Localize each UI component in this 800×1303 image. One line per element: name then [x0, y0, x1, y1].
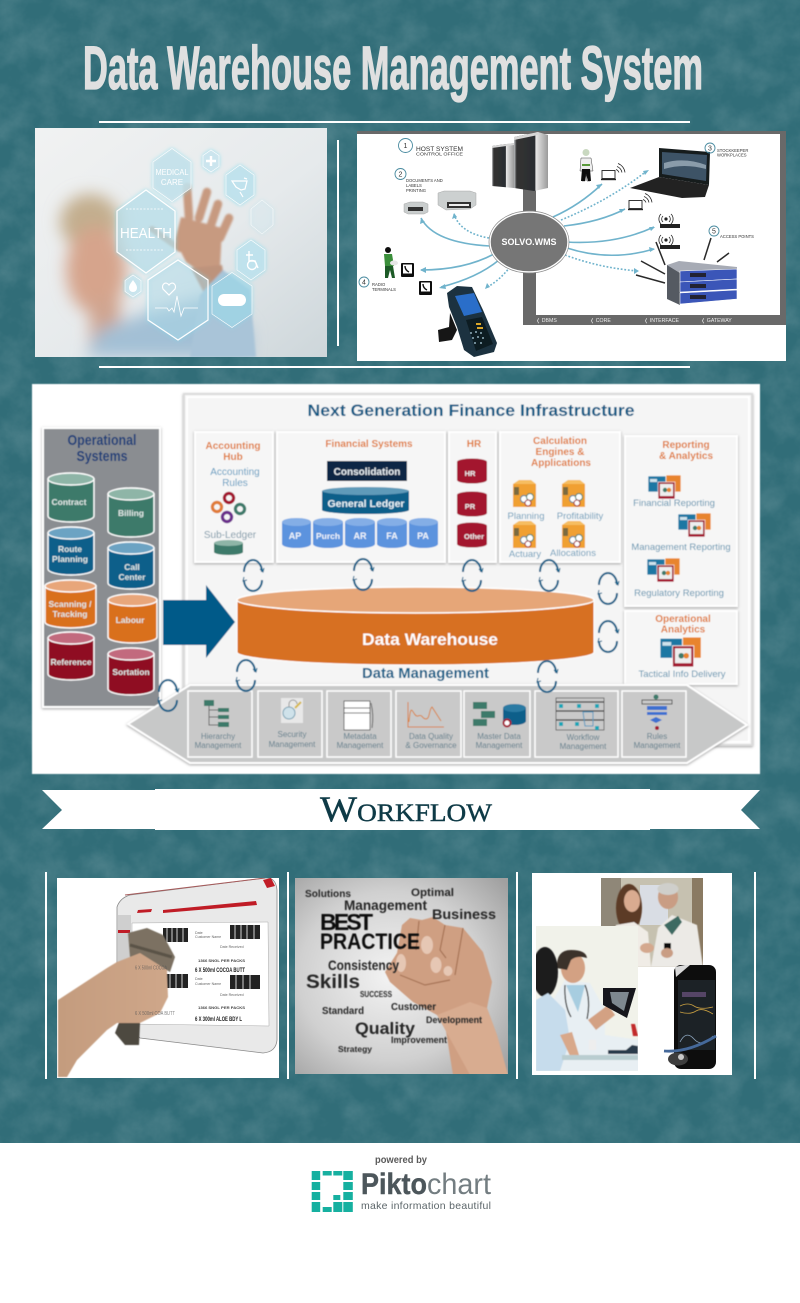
- panel: operational analytics: Operational: [655, 614, 711, 625]
- photo: doctors: [532, 873, 732, 1075]
- module labels: Hierarchy: [201, 732, 235, 741]
- arrow: operational to warehouse: [163, 585, 235, 658]
- data management band: [128, 685, 747, 763]
- module labels: Metadata: [343, 732, 377, 741]
- infrastructure heading: Next Generation Finance Infrastructure: [308, 401, 634, 420]
- panel: calculation engines: Applications: [531, 458, 591, 469]
- panel: calculation engines: Profitability: [557, 511, 603, 522]
- panel: HR: PR: [465, 502, 476, 511]
- panel: financial systems: Purch: [316, 531, 340, 541]
- panel: reporting and analytics: Financial Reporting: [633, 498, 715, 509]
- panel: financial systems: [277, 432, 445, 562]
- handheld terminal: [438, 286, 497, 357]
- cylinders: operational systems: [45, 473, 157, 695]
- divider vertical: [337, 140, 339, 346]
- diagram labels: RADIO: [372, 282, 386, 287]
- small device icons: [401, 164, 652, 295]
- panel: calculation engines: Actuary: [509, 549, 541, 560]
- diagram labels: PRINTING: [406, 188, 426, 193]
- icons: sync connectors: [158, 559, 619, 711]
- panel: operational analytics: [625, 611, 737, 684]
- scanner and arm: [58, 928, 175, 1077]
- cylinder labels: Planning: [52, 554, 88, 564]
- panel: calculation engines: Allocations: [550, 548, 596, 559]
- photo: barcode scanner: Customer Name: [195, 982, 221, 986]
- panel: financial systems: AR: [354, 531, 367, 541]
- diagram labels: 5: [712, 228, 716, 236]
- diagram labels: ACCESS POINTS: [720, 234, 754, 239]
- operational heading: [68, 432, 136, 465]
- photo: barcode scanner: 6 X 500ml COCOA: [135, 966, 167, 972]
- panel: HR: [449, 432, 496, 562]
- diagram: SOLVO.WMS: [357, 131, 786, 361]
- module labels: Security: [278, 730, 306, 739]
- piktochart wordmark: Pikto: [361, 1168, 427, 1201]
- hexagon labels: CARE: [161, 178, 183, 187]
- panel: HR: HR: [467, 439, 482, 450]
- module labels: Rules: [647, 732, 667, 741]
- module labels: Master Data: [477, 732, 521, 741]
- workflow dividers: [45, 872, 756, 1079]
- photo: barcode scanner: 6 X 500ml COA BUTT: [135, 1011, 175, 1017]
- servers: [492, 132, 548, 191]
- module labels: Management: [337, 741, 384, 750]
- diagram labels: 3: [708, 146, 712, 152]
- word cloud: Management: [344, 897, 427, 913]
- gray band labels: ❬ GATEWAY: [701, 318, 732, 324]
- photo: barcode scanner: Date Received: [220, 945, 244, 949]
- router stack: [636, 238, 737, 305]
- photo: barcode scanner: Date Received: [220, 993, 244, 997]
- cylinder labels: Reference: [50, 657, 92, 667]
- module labels: Management: [634, 741, 681, 750]
- module labels: Management: [476, 741, 523, 750]
- cylinder labels: Contract: [52, 497, 87, 507]
- cylinder labels: Billing: [118, 508, 144, 518]
- operational heading: Operational: [68, 432, 136, 449]
- panel: calculation engines: Planning: [508, 511, 544, 522]
- panel: operational systems: [43, 428, 160, 707]
- hexagon labels: MEDICAL: [156, 168, 189, 177]
- photo: health hexagons: [35, 128, 327, 357]
- cylinder labels: Center: [119, 572, 146, 582]
- word cloud: Improvement: [391, 1035, 447, 1045]
- hexagon labels: [120, 168, 189, 242]
- diagram labels: HOST SYSTEM: [416, 146, 463, 153]
- module labels: Workflow: [567, 733, 600, 742]
- data management heading: Data Management: [362, 665, 489, 682]
- panel: HR: HR: [465, 469, 476, 478]
- panel: financial systems: Financial Systems: [325, 439, 413, 450]
- word cloud: [305, 887, 496, 1054]
- word cloud: Quality: [355, 1019, 416, 1038]
- cylinder labels: Call: [124, 562, 140, 572]
- upper doctors photo: [601, 878, 703, 967]
- word cloud: PRACTICE: [320, 929, 420, 954]
- footer panel: chart: [427, 1168, 492, 1201]
- panel: accounting hub: Accounting: [206, 441, 260, 452]
- word cloud: Development: [426, 1015, 483, 1026]
- photo: barcode scanner: Date: [195, 977, 203, 981]
- module labels: & Governance: [405, 741, 457, 750]
- tagline: make information beautiful: [361, 1200, 491, 1212]
- access points: [659, 214, 680, 249]
- printers: [404, 191, 476, 214]
- icons: engine cubes: [513, 480, 585, 548]
- photo: barcode scanner: 6 X 500ml COCOA BUTT: [195, 967, 245, 974]
- diagram labels: STOCKKEEPER: [717, 148, 748, 153]
- main chart: finance infrastructure: [32, 384, 760, 774]
- panel: calculation engines: Calculation: [533, 436, 587, 447]
- panel: calculation engines: [500, 432, 620, 562]
- diagram labels: 2: [399, 172, 403, 178]
- word cloud: Customer: [391, 1002, 436, 1013]
- app window: [117, 878, 277, 1053]
- photo: barcode scanner: Date: [195, 931, 203, 935]
- diagram labels: 4: [362, 280, 366, 286]
- word cloud: Optimal: [411, 887, 454, 899]
- cylinder labels: Route: [58, 544, 82, 554]
- module labels: Management: [195, 741, 242, 750]
- cylinder labels: Sortation: [112, 667, 150, 677]
- panel: infrastructure: [184, 394, 752, 745]
- operational heading: Systems: [76, 448, 128, 465]
- diagram labels: [359, 138, 754, 292]
- word cloud: Skills: [306, 972, 360, 993]
- diagram labels: 1: [404, 143, 408, 150]
- word cloud: SUCCESS: [360, 990, 393, 999]
- word cloud: Business: [432, 906, 496, 922]
- panel: HR: Other: [464, 532, 484, 541]
- smartphone with stethoscope: [664, 965, 716, 1069]
- panel: reporting and analytics: Reporting: [662, 440, 710, 451]
- wms hub: [489, 211, 569, 273]
- panel: operational analytics: Tactical Info Delivery: [638, 669, 726, 680]
- word cloud: Solutions: [305, 889, 351, 900]
- diagram labels: DOCUMENTS AND: [406, 178, 443, 183]
- gray band labels: [536, 318, 732, 324]
- panel: operational analytics: Analytics: [661, 624, 706, 636]
- panel: accounting hub: [195, 432, 273, 562]
- divider middle: [99, 366, 690, 368]
- panel: reporting and analytics: [625, 436, 737, 606]
- icons: reports: [647, 475, 711, 582]
- icon: gears: [212, 493, 245, 522]
- photo: barcode scanner: [57, 878, 279, 1078]
- arrows: [421, 170, 654, 288]
- panel: accounting hub: Hub: [223, 452, 243, 463]
- module labels: Management: [560, 742, 607, 751]
- lower doctors photo: [532, 926, 640, 1071]
- icon: piktochart logo: [312, 1171, 353, 1212]
- powered by: powered by: [375, 1155, 427, 1166]
- hand: [152, 187, 256, 357]
- hexagon icons: [126, 156, 258, 316]
- divider top: [99, 121, 690, 123]
- module labels: Data Quality: [409, 732, 453, 741]
- photo: barcode scanner: 6 X 300ml ALOE BDY L: [195, 1016, 242, 1023]
- diagram labels: TERMINALS: [372, 287, 396, 292]
- diagram labels: CONTROL OFFICE: [416, 152, 463, 156]
- gray band labels: ❬ DBMS: [536, 318, 557, 324]
- cylinder labels: Labour: [116, 615, 145, 625]
- icons: data management modules: [204, 694, 672, 730]
- panel: financial systems: AP: [289, 531, 301, 541]
- cylinder labels: Tracking: [53, 609, 87, 619]
- panel: financial systems: FA: [386, 531, 398, 541]
- diagram labels: WORKPLACES: [717, 152, 747, 158]
- cylinder labels: Scanning /: [49, 599, 92, 609]
- panel: reporting and analytics: Management Reporting: [631, 542, 731, 553]
- photo: barcode scanner: Customer Name: [195, 935, 221, 939]
- word cloud: Strategy: [338, 1044, 372, 1054]
- panel: accounting hub: Rules: [222, 478, 248, 489]
- panel: financial systems: General Ledger: [327, 498, 405, 510]
- photo: barcode scanner: 1366 SNGL PER PACKS: [198, 1005, 245, 1010]
- data warehouse cylinder: Data Warehouse: [362, 630, 498, 649]
- panel: accounting hub: Accounting: [210, 467, 260, 478]
- word cloud: Standard: [322, 1006, 364, 1017]
- gray band labels: ❬ INTERFACE: [644, 318, 679, 324]
- hexagons: [117, 148, 273, 340]
- big laptop: [630, 148, 710, 198]
- diagram labels: LABELS: [406, 183, 422, 188]
- word cloud: Consistency: [328, 957, 399, 973]
- panel: financial systems: PA: [417, 531, 429, 541]
- module labels: Management: [269, 740, 316, 749]
- photo: best practice: [295, 878, 508, 1075]
- photo: barcode scanner: 1366 SNGL PER PACKS: [198, 958, 245, 963]
- ribbon: [42, 789, 760, 830]
- data warehouse cylinder: [237, 587, 594, 665]
- module labels: [195, 730, 681, 751]
- wms hub: SOLVO.WMS: [502, 237, 556, 247]
- footer panel: [0, 1143, 800, 1303]
- cylinder labels: [49, 497, 150, 677]
- panel: financial systems: Consolidation: [334, 467, 400, 478]
- people: [384, 149, 593, 278]
- word cloud: BEST: [320, 909, 373, 935]
- panel: reporting and analytics: Regulatory Reporting: [634, 588, 724, 599]
- ribbon heading: Workflow: [320, 789, 492, 829]
- panel: calculation engines: Engines &: [536, 447, 584, 458]
- hexagon labels: HEALTH: [120, 225, 172, 242]
- gray band labels: ❬ CORE: [590, 318, 611, 324]
- panel: accounting hub: Sub-Ledger: [204, 530, 257, 541]
- panel: reporting and analytics: & Analytics: [659, 451, 713, 462]
- hand: [385, 917, 508, 1075]
